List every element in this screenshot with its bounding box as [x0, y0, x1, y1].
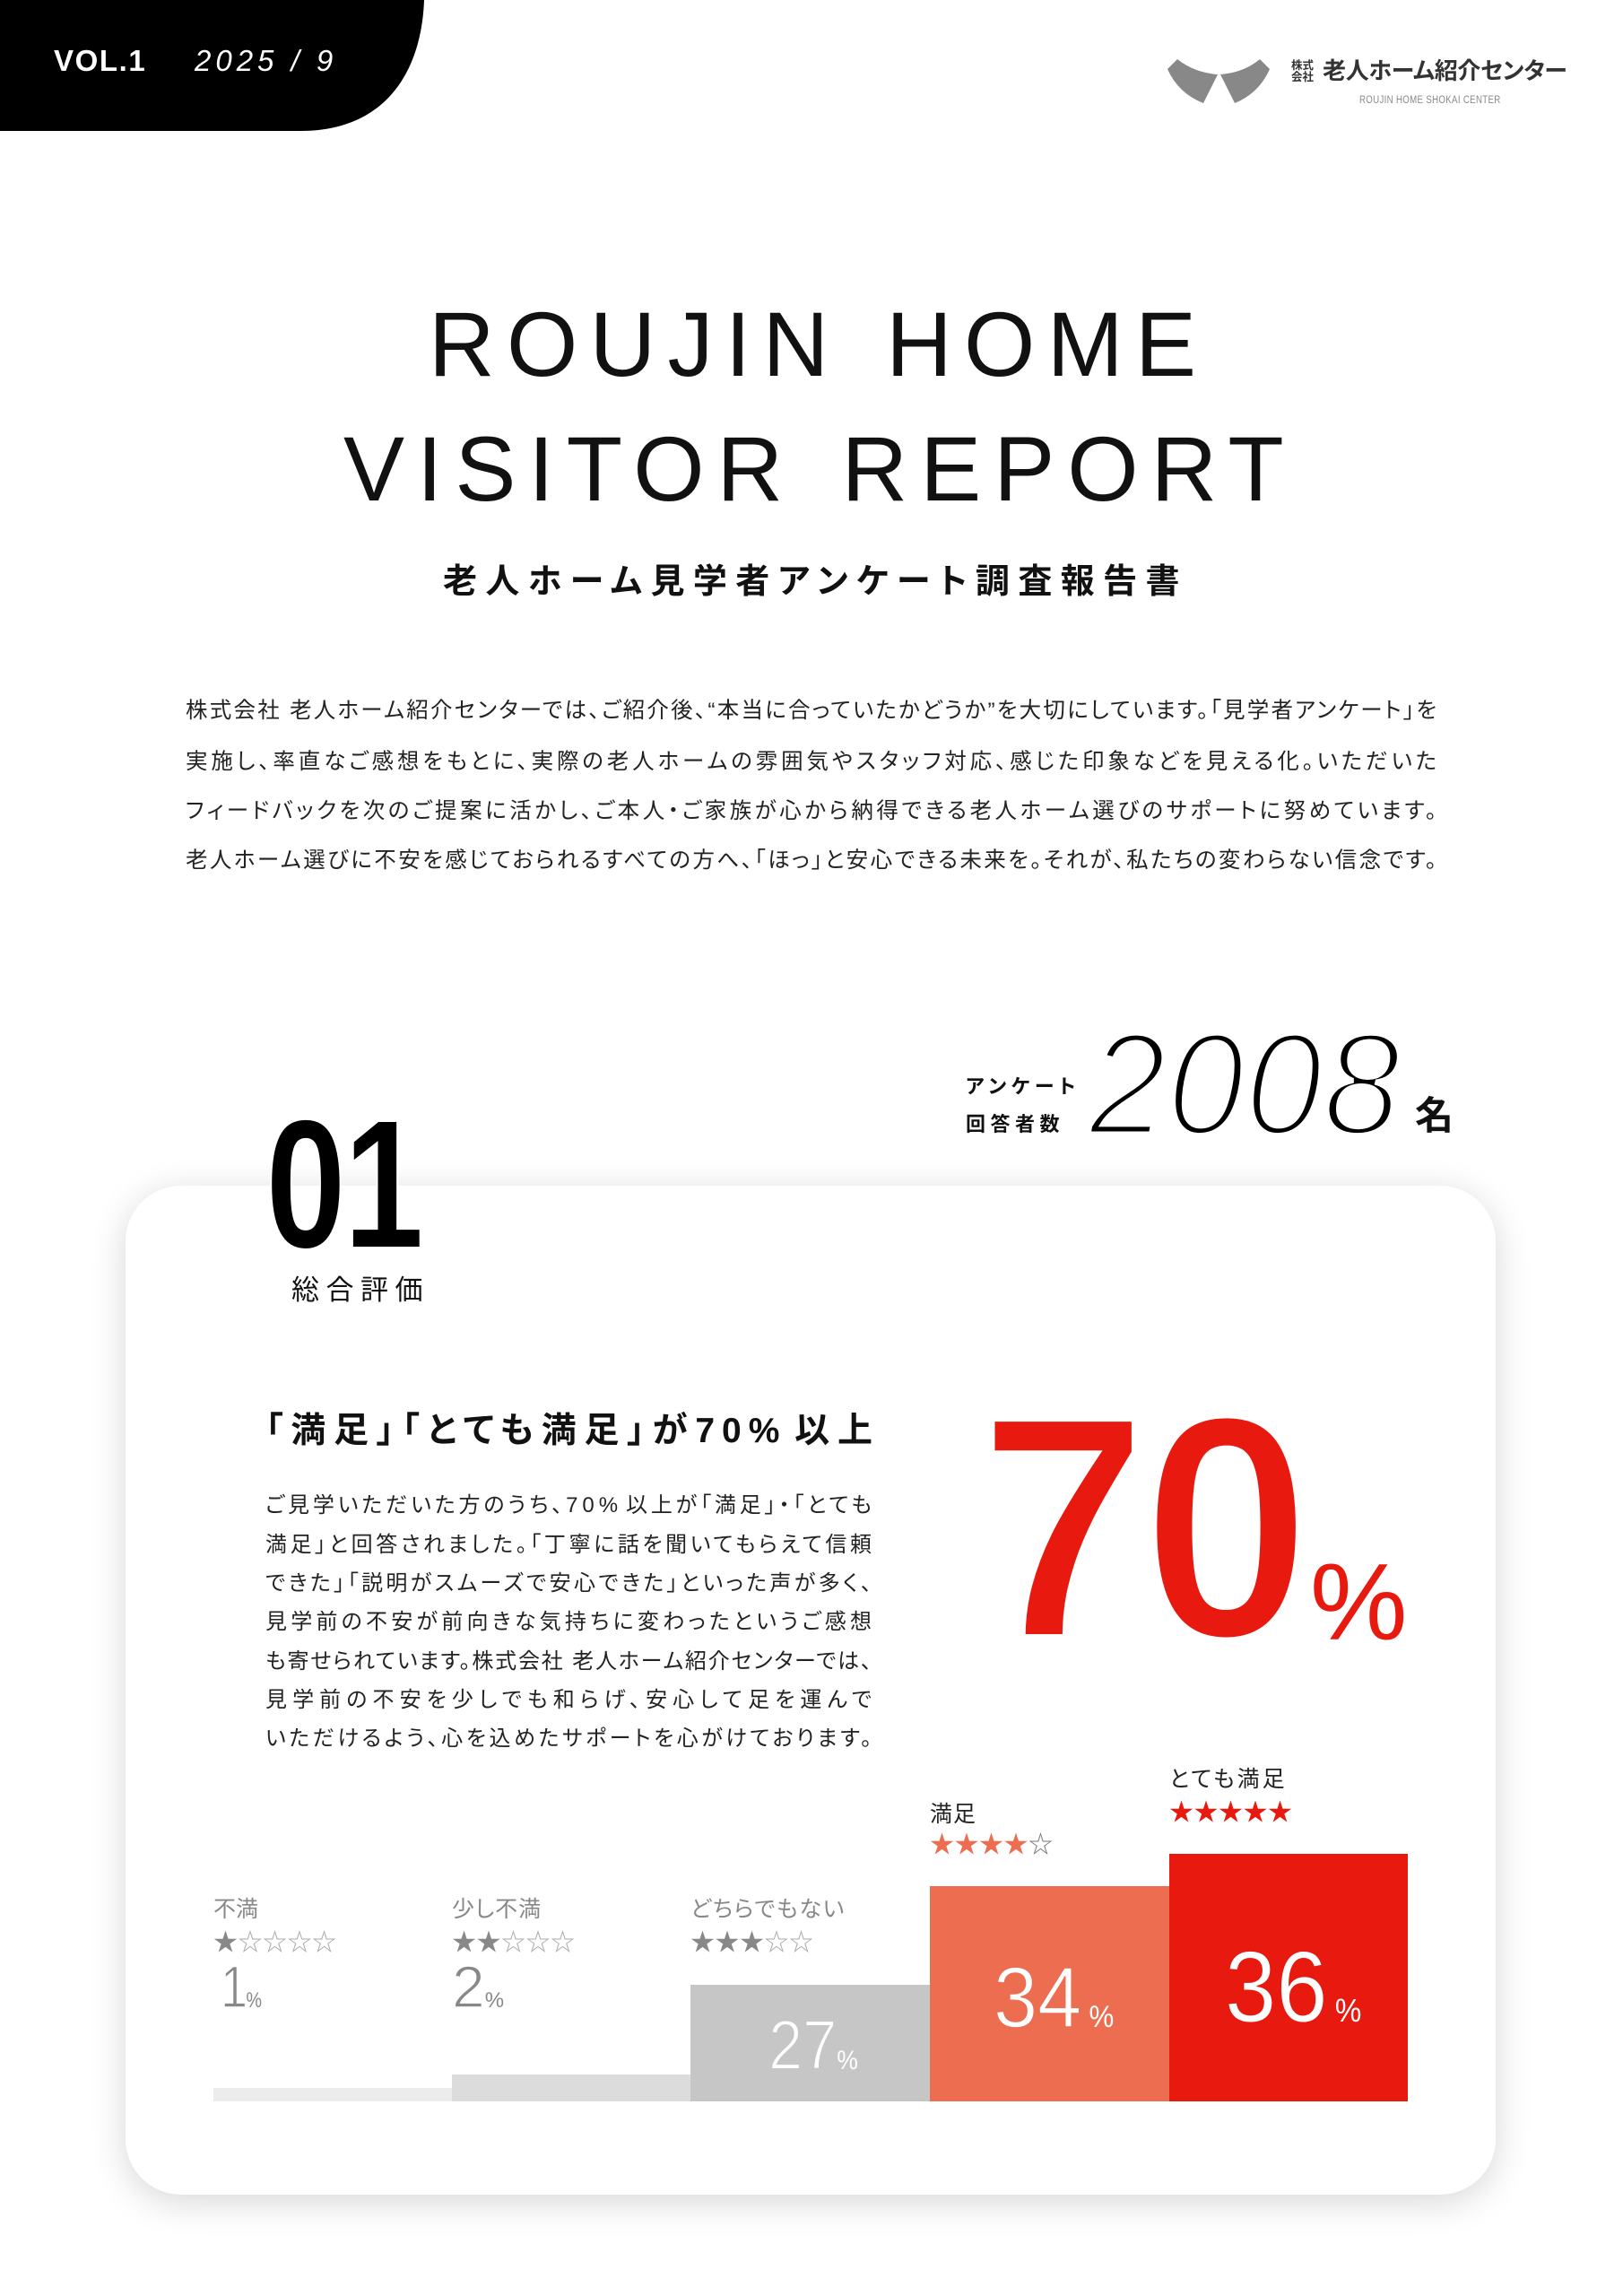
card body text: いただけるよう、心を込めたサポートを心がけております。 [265, 1726, 872, 1751]
respondents unit: 名 [1415, 1095, 1454, 1138]
section number: 01 [265, 1082, 421, 1287]
logo small text: 会社 [1291, 71, 1314, 83]
label: 満足: 満足 [930, 1802, 976, 1827]
subtitle: 老人ホーム見学者アンケート調査報告書 [443, 563, 1188, 601]
value: 2%: 2% [452, 1953, 504, 2020]
respondents label: アンケート [966, 1075, 1081, 1098]
logo company name: 老人ホーム紹介センター [1323, 57, 1567, 84]
card body text [265, 1493, 872, 1751]
intro text: フィードバックを次のご提案に活かし、ご本人・ご家族が心から納得できる老人ホーム選びのサポートに努めています。 [186, 799, 1436, 823]
logo small text: 株式 [1291, 59, 1314, 72]
respondents number: 2008 [1089, 1002, 1401, 1166]
logo small text [1291, 59, 1314, 83]
value: 27%: 27% [768, 2005, 858, 2084]
logo english name: ROUJIN HOME SHOKAI CENTER [1359, 95, 1501, 106]
value: 1%: 1% [221, 1953, 260, 2020]
card body text: 満足」と回答されました。「丁寧に話を聞いてもらえて信頼 [265, 1533, 872, 1557]
stars: 少し不満: ★★☆☆☆ [452, 1923, 576, 1958]
stars: とても満足: ★★★★★ [1169, 1793, 1293, 1828]
section name: 総合評価 [291, 1274, 430, 1306]
bar: とても満足 [1169, 1854, 1408, 2101]
icon: collar mark [1167, 59, 1270, 103]
bar chart [213, 1767, 1408, 2101]
card heading: 「満足」「とても満足」が70%以上 [265, 1412, 872, 1450]
issue number: VOL.1 [54, 44, 146, 77]
logo [1167, 57, 1567, 106]
respondents label: 回答者数 [966, 1113, 1064, 1135]
card body text: も寄せられています。株式会社 老人ホーム紹介センターでは、 [265, 1649, 872, 1674]
bar: 少し不満 [452, 2074, 690, 2101]
card body text: ご見学いただいた方のうち、70%以上が「満足」・「とても [265, 1493, 872, 1518]
issue date: 2025 / 9 [195, 44, 337, 77]
card body text: できた」「説明がスムーズで安心できた」といった声が多く、 [265, 1571, 872, 1596]
big percent sign: % [1310, 1541, 1407, 1663]
stars: どちらでもない: ★★★☆☆ [690, 1923, 814, 1958]
label: 不満: 不満 [213, 1897, 258, 1922]
stars: 不満: ★☆☆☆☆ [213, 1923, 337, 1958]
header tab [0, 0, 424, 131]
card body text: 見学前の不安が前向きな気持ちに変わったというご感想 [265, 1610, 872, 1634]
card body text: 見学前の不安を少しでも和らげ、安心して足を運んで [265, 1688, 872, 1712]
intro text: 実施し、率直なご感想をもとに、実際の老人ホームの雰囲気やスタッフ対応、感じた印象などを見える化。いただいた [186, 750, 1436, 774]
label: 少し不満: 少し不満 [452, 1897, 542, 1922]
intro text: 老人ホーム選びに不安を感じておられるすべての方へ、「ほっ」と安心できる未来を。それが、私たちの変わらない信念です。 [186, 848, 1436, 873]
intro text: 株式会社 老人ホーム紹介センターでは、ご紹介後、“本当に合っていたかどうか”を大切にしています。「見学者アンケート」を [186, 699, 1436, 723]
bar: 不満 [213, 2088, 452, 2101]
title line 2: VISITOR REPORT [343, 418, 1297, 520]
value: 34%: 34% [994, 1950, 1114, 2046]
bar: どちらでもない [690, 1985, 930, 2101]
title line 1: ROUJIN HOME [429, 293, 1208, 396]
label: とても満足: とても満足 [1169, 1767, 1288, 1792]
stars: 満足: ★★★★☆ [930, 1825, 1053, 1860]
label: どちらでもない: どちらでもない [690, 1897, 846, 1922]
intro text [186, 699, 1436, 873]
big percentage [978, 1350, 1407, 1706]
value: 36%: 36% [1225, 1931, 1361, 2043]
respondents label [966, 1075, 1081, 1135]
panel: overall rating card [126, 1186, 1496, 2195]
respondents count [966, 1002, 1454, 1166]
bar: 満足 [930, 1886, 1169, 2101]
big number 70: 70 [978, 1350, 1305, 1706]
title [343, 293, 1297, 520]
